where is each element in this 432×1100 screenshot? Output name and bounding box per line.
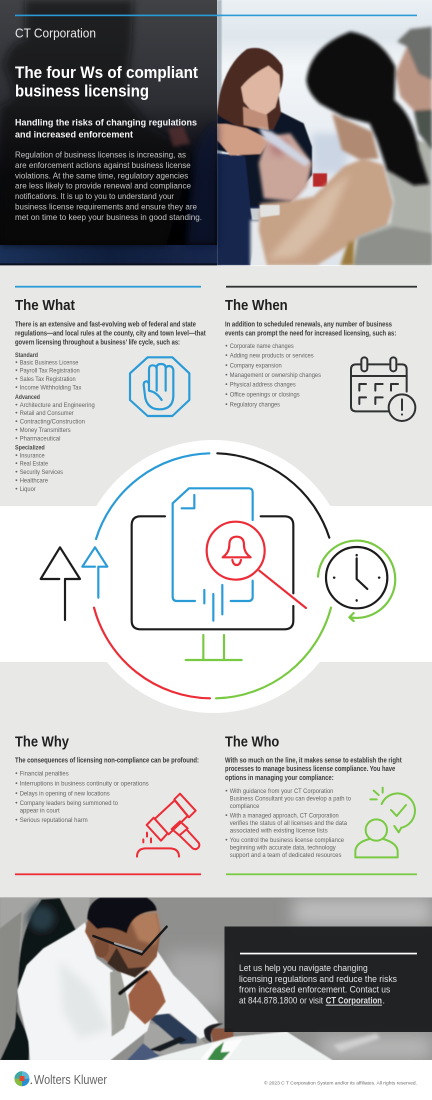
text block: introduction: Regulation of business licenses is increasing, as bbox=[15, 150, 186, 160]
list: license categories: Liquor bbox=[20, 486, 36, 493]
desk and report bbox=[143, 1032, 333, 1061]
list: consequences: • bbox=[15, 800, 18, 807]
list: license categories: • bbox=[15, 418, 18, 425]
list: business events: • bbox=[225, 372, 228, 379]
copyright: © 2023 C T Corporation System and/or its affiliates. All rights reserved. bbox=[264, 1080, 417, 1086]
list: license categories: Architecture and Engineering bbox=[20, 402, 95, 409]
list: license categories: • bbox=[15, 469, 18, 476]
icon: green cycle arrow bbox=[318, 541, 395, 621]
list: business events: • bbox=[225, 382, 228, 389]
list: license categories: Income Withholding Tax bbox=[20, 384, 82, 391]
list: options: You control the business license compliance bbox=[230, 837, 344, 844]
list: consequences: Delays in opening of new locations bbox=[20, 790, 110, 797]
list: consequences: • bbox=[15, 790, 18, 797]
icon: black up arrow bbox=[41, 547, 80, 620]
text block: introduction: are less likely to provide renewal and compliance bbox=[15, 181, 191, 191]
title bbox=[15, 64, 198, 100]
list: consequences: • bbox=[15, 817, 18, 824]
list: business events: • bbox=[225, 362, 228, 369]
list: options: compliance bbox=[230, 803, 260, 810]
list: options: Business Consultant you can develop a path to bbox=[230, 796, 351, 803]
list: business events: Management or ownership changes bbox=[230, 372, 322, 379]
header photo: meeting bbox=[217, 0, 432, 265]
text: contact message: Let us help you navigate changing bbox=[239, 962, 368, 973]
white circle behind central graphic bbox=[77, 440, 350, 713]
text: When intro: events can prompt the need for increased licensing, such as: bbox=[225, 330, 396, 338]
icon: gavel bbox=[137, 794, 199, 857]
list: options: With guidance from your CT Corporation bbox=[230, 788, 334, 795]
text: What intro: There is an extensive and fast-evolving web of federal and state bbox=[15, 322, 196, 329]
list: business events: Company expansion bbox=[230, 362, 282, 369]
ring: red arc bbox=[94, 608, 210, 698]
text block: introduction: met on time to keep your business in good standing. bbox=[15, 212, 202, 222]
text block: introduction bbox=[15, 150, 202, 222]
list: business events bbox=[225, 343, 322, 408]
list: license categories: Contracting/Construction bbox=[20, 418, 85, 425]
list: business events: • bbox=[225, 391, 228, 398]
list: license categories bbox=[15, 352, 95, 493]
icon: magnifier with bell bbox=[207, 522, 306, 608]
header photo: left side behind panel bbox=[0, 245, 217, 266]
footer bar bbox=[0, 1060, 432, 1100]
shirt bbox=[17, 922, 218, 1061]
subtitle bbox=[15, 118, 197, 141]
list: business events: Adding new products or services bbox=[230, 353, 314, 360]
heading: The When: The When bbox=[225, 297, 288, 314]
list: license categories: • bbox=[15, 427, 18, 434]
icon: blue up arrow bbox=[82, 547, 107, 598]
text: contact message: at 844.878.1800 or visit bbox=[239, 995, 323, 1006]
panel: The Who bbox=[225, 734, 417, 875]
man at right bbox=[395, 27, 432, 150]
text: Who intro: options in managing your compliance: bbox=[225, 775, 334, 782]
panel: The Why bbox=[15, 734, 201, 875]
icon: monitor bbox=[132, 516, 293, 629]
text: What intro bbox=[15, 322, 206, 346]
list: license categories: Insurance bbox=[20, 453, 45, 460]
list: license categories: • bbox=[15, 461, 18, 468]
list: options: • bbox=[225, 837, 228, 844]
text: Who intro bbox=[225, 757, 402, 782]
ring: green arc bbox=[216, 608, 331, 698]
table and chair bbox=[313, 173, 327, 187]
panel: call to action bbox=[224, 926, 432, 1032]
list: consequences: • bbox=[15, 771, 18, 778]
list: consequences: Company leaders being summoned to bbox=[20, 800, 118, 807]
text block: introduction: notifications. It is up to you to understand your bbox=[15, 191, 174, 201]
list: business events: • bbox=[225, 353, 228, 360]
list: business events: • bbox=[225, 401, 228, 408]
list: license categories: Money Transmitters bbox=[20, 427, 71, 434]
heading: The What: The What bbox=[15, 297, 75, 314]
list: consequences: • bbox=[15, 781, 18, 788]
icon: monitor stand bbox=[186, 635, 242, 660]
text block: introduction: business license requirements and ensure they are bbox=[15, 202, 197, 212]
list: license categories: Security Services bbox=[20, 469, 64, 476]
panel: The What bbox=[15, 286, 206, 493]
list: license categories: • bbox=[15, 486, 18, 493]
chair bbox=[0, 897, 90, 1061]
logo dot bbox=[30, 1082, 32, 1084]
list: options: support and a team of dedicated resources bbox=[230, 852, 342, 859]
list: license categories: • bbox=[15, 435, 18, 442]
list: license categories: Pharmaceutical bbox=[20, 435, 61, 442]
panel: grey content background bbox=[0, 266, 432, 898]
head bbox=[85, 898, 161, 977]
list: consequences: Interruptions in business continuity or operations bbox=[20, 781, 149, 788]
list: license categories: • bbox=[15, 478, 18, 485]
text block: introduction: violations. At the same time, regulatory agencies bbox=[15, 170, 188, 180]
ring: black arc bbox=[217, 453, 329, 538]
central graphic bbox=[41, 453, 395, 698]
ring: blue arc bbox=[96, 453, 209, 539]
logo mark bbox=[14, 1071, 30, 1086]
list: options: With a managed approach, CT Corporation bbox=[230, 813, 339, 820]
icon: person with check bubble bbox=[355, 788, 415, 857]
list: options: beginning with accurate data, technology bbox=[230, 844, 336, 851]
list: consequences: appear in court bbox=[20, 807, 60, 814]
list: license categories: Real Estate bbox=[20, 461, 48, 468]
list: license categories: Healthcare bbox=[20, 478, 48, 485]
text: Why intro: The consequences of licensing non-compliance can be profound: bbox=[15, 757, 199, 764]
list: options bbox=[225, 788, 351, 859]
seated woman bbox=[217, 48, 312, 265]
text: Who intro: With so much on the line, it makes sense to establish the right bbox=[225, 757, 402, 764]
list: license categories: • bbox=[15, 384, 18, 391]
icon: clock bbox=[326, 547, 387, 608]
list: license categories: Payroll Tax Registration bbox=[20, 367, 80, 374]
text: contact message: . bbox=[382, 995, 385, 1006]
list: options: • bbox=[225, 813, 228, 820]
text: What intro: govern licensing throughout a business' life cycle, such as: bbox=[15, 340, 180, 346]
hand and pen bbox=[120, 970, 233, 1043]
panel: header dark overlay bbox=[0, 0, 217, 245]
list: business events: • bbox=[225, 343, 228, 350]
glasses bbox=[93, 927, 167, 954]
text: contact message: CT Corporation bbox=[326, 995, 382, 1006]
list: business events: Corporate name changes bbox=[230, 343, 294, 350]
heading: The Why: The Why bbox=[15, 734, 70, 751]
subtitle: and increased enforcement bbox=[15, 130, 134, 141]
list: license categories: • bbox=[15, 410, 18, 417]
text: When intro: In addition to scheduled renewals, any number of business bbox=[225, 322, 392, 329]
list: license categories: Standard bbox=[15, 352, 38, 359]
list: business events: Regulatory changes bbox=[230, 401, 281, 408]
list: consequences bbox=[15, 771, 149, 824]
list: license categories: Specialized bbox=[15, 445, 45, 452]
panel: The When bbox=[225, 286, 417, 421]
text: contact message bbox=[239, 962, 397, 1006]
list: license categories: Advanced bbox=[15, 394, 40, 401]
list: license categories: Retail and Consumer bbox=[20, 410, 74, 417]
chair arm and floor bbox=[127, 1010, 207, 1061]
list: license categories: • bbox=[15, 367, 18, 374]
text: contact message: from increased enforcement. Contact us bbox=[239, 984, 391, 995]
icon: calendar with alert bbox=[351, 357, 415, 421]
list: consequences: Serious reputational harm bbox=[20, 817, 88, 824]
list: license categories: Basic Business License bbox=[20, 359, 79, 366]
text: brand name: CT Corporation bbox=[15, 26, 96, 40]
list: options: verifies the status of all licenses and the data bbox=[230, 820, 347, 827]
text: When intro bbox=[225, 322, 396, 338]
list: options: • bbox=[225, 788, 228, 795]
white band behind central graphic bbox=[0, 506, 432, 662]
text: What intro: regulations—and local rules at the county, city and town level—that bbox=[15, 330, 206, 338]
footer photo: man reading report bbox=[0, 897, 432, 1061]
list: license categories: • bbox=[15, 402, 18, 409]
subtitle: Handling the risks of changing regulations bbox=[15, 118, 197, 129]
list: license categories: • bbox=[15, 453, 18, 460]
title: business licensing bbox=[15, 82, 149, 100]
list: license categories: • bbox=[15, 376, 18, 383]
list: consequences: Financial penalties bbox=[20, 771, 69, 778]
title: The four Ws of compliant bbox=[15, 64, 198, 82]
logo: Wolters Kluwer bbox=[14, 1071, 107, 1087]
list: license categories: • bbox=[15, 359, 18, 366]
text: contact message: licensing regulations and reduce the risks bbox=[239, 973, 397, 984]
list: options: associated with existing license lists bbox=[230, 827, 328, 834]
text block: introduction: are enforcement actions against business license bbox=[15, 160, 191, 170]
list: license categories: Sales Tax Registration bbox=[20, 376, 76, 383]
heading: The Who: The Who bbox=[225, 734, 279, 751]
logo wordmark: Wolters Kluwer bbox=[34, 1073, 107, 1087]
header rule bbox=[15, 15, 417, 16]
list: business events: Office openings or closings bbox=[230, 391, 300, 398]
list: business events: Physical address changes bbox=[230, 382, 296, 389]
icon: stop hand bbox=[130, 357, 189, 416]
text: Who intro: processes to manage business license compliance. You have bbox=[225, 766, 395, 773]
icon: document bbox=[173, 488, 253, 621]
foreground woman bbox=[259, 158, 394, 265]
